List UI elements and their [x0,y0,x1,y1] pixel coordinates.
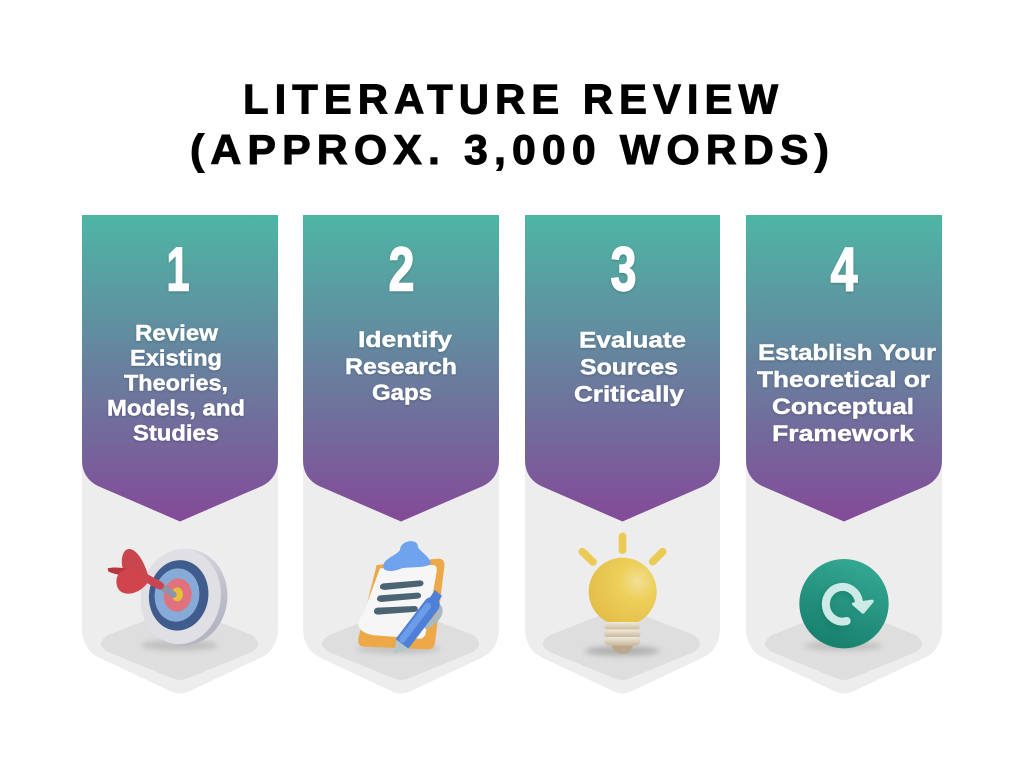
title [190,76,835,173]
step label: Gaps [372,380,432,405]
step label: Review [135,320,219,346]
ribbon header [82,215,278,522]
step label: Research [345,354,457,379]
card background [525,215,720,694]
step label: Studies [133,420,219,446]
step label [574,328,686,406]
step label [107,320,245,446]
panel: step 2 [303,215,499,694]
step label [757,340,936,446]
card background [746,215,942,694]
pedestal [765,608,922,680]
icon: dart target [108,544,234,651]
panel: step 4 [746,215,942,694]
step label: Framework [772,421,915,446]
step number: 2 [388,236,414,304]
icon: green refresh button [799,559,889,651]
ribbon header [525,215,720,522]
title: LITERATURE REVIEW [243,76,784,122]
step label: Existing [130,346,222,370]
pedestal [101,608,258,680]
step label: Sources [580,354,678,380]
card background [303,215,499,694]
step label: Theoretical or [757,367,930,392]
step number: 3 [610,236,636,304]
pedestal [322,608,479,680]
step number: 4 [830,236,858,304]
icon: light bulb [582,533,663,656]
step number: 1 [166,236,190,304]
step label: Establish Your [758,340,936,365]
title: (APPROX. 3,000 WORDS) [190,126,835,173]
step label: Evaluate [579,328,686,352]
step label: Theories, [124,370,228,396]
ribbon header [303,215,499,522]
step label [345,327,457,405]
step label: Identify [358,327,453,352]
step label: Conceptual [772,394,914,419]
pedestal [543,608,700,680]
icon: clipboard and pen [357,541,444,654]
card background [82,215,278,694]
ribbon header [746,215,942,522]
panel: step 1 [82,215,278,694]
step label: Models, and [107,396,245,420]
step label: Critically [574,382,685,406]
panel: step 3 [525,215,720,694]
